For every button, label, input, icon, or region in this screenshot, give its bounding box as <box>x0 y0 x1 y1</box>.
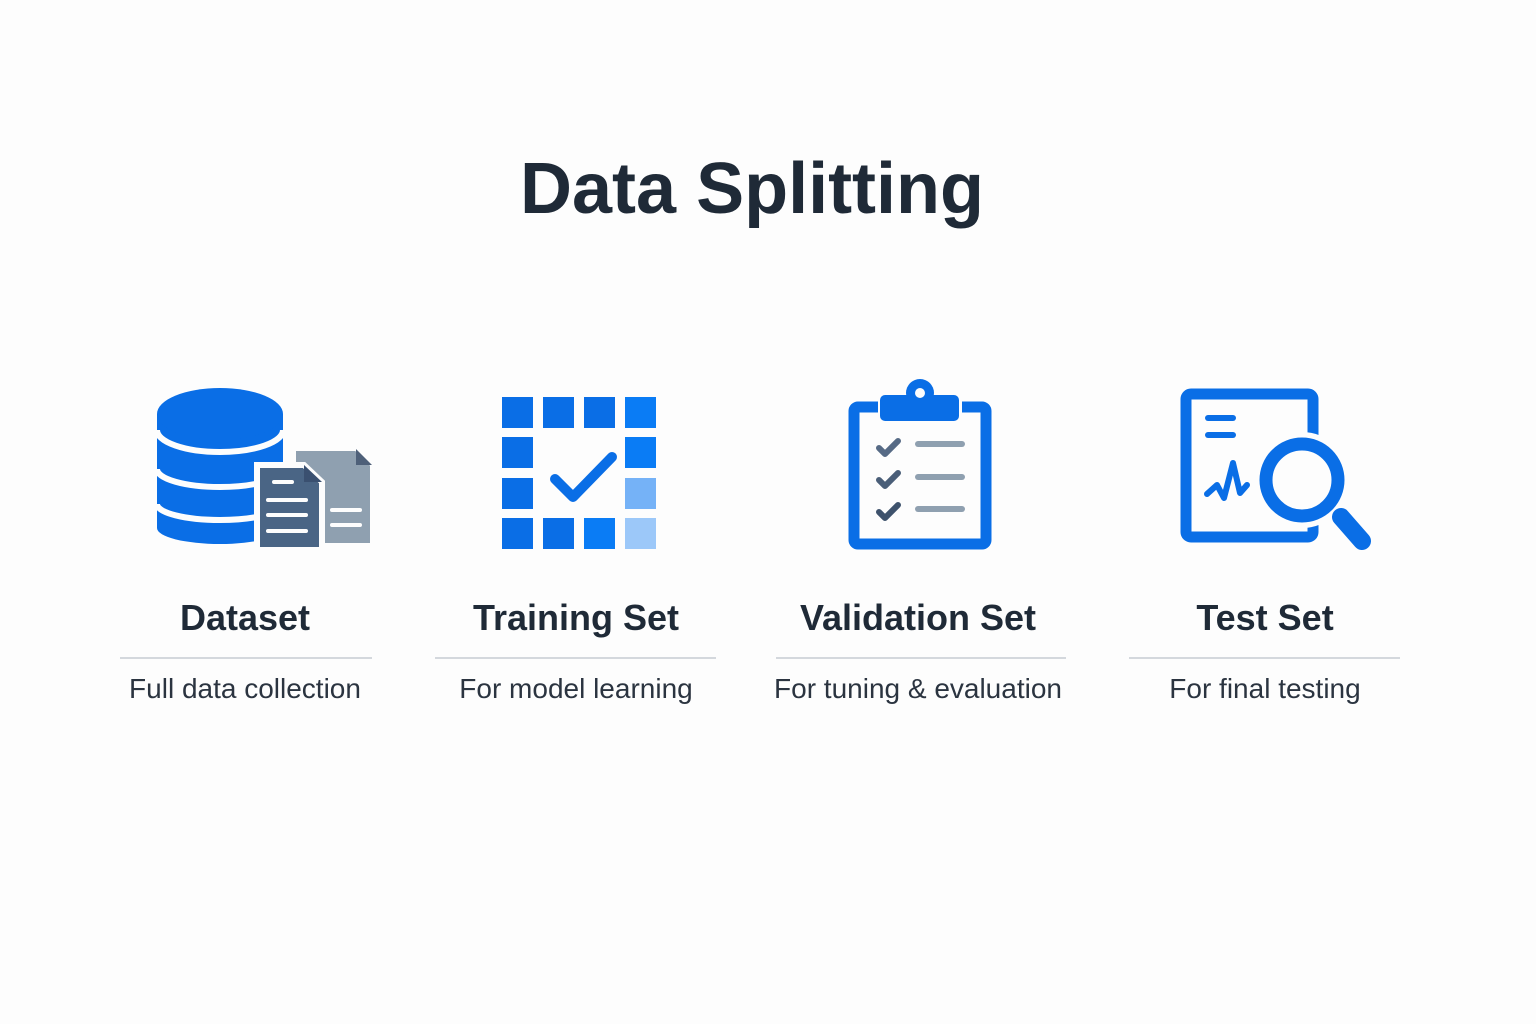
title: Data Splitting <box>520 149 984 229</box>
icon: database with documents <box>157 388 372 550</box>
icon: training grid with check <box>502 397 656 549</box>
label: Training Set: For model learning <box>459 673 693 704</box>
icon: clipboard checklist <box>854 379 986 544</box>
label: Test Set: For final testing <box>1169 673 1361 704</box>
label: Test Set: Test Set <box>1196 597 1334 638</box>
label: Validation Set <box>774 597 1066 704</box>
label: Validation Set: For tuning & evaluation <box>774 673 1062 704</box>
icon: document with magnifier <box>1186 394 1362 541</box>
label: Dataset: Dataset <box>180 597 310 638</box>
label: Dataset: Full data collection <box>129 673 361 704</box>
label: Test Set <box>1129 597 1400 704</box>
label: Training Set <box>435 597 716 704</box>
label: Validation Set: Validation Set <box>800 597 1036 638</box>
label: Training Set: Training Set <box>473 597 679 638</box>
label: Dataset <box>120 597 372 704</box>
